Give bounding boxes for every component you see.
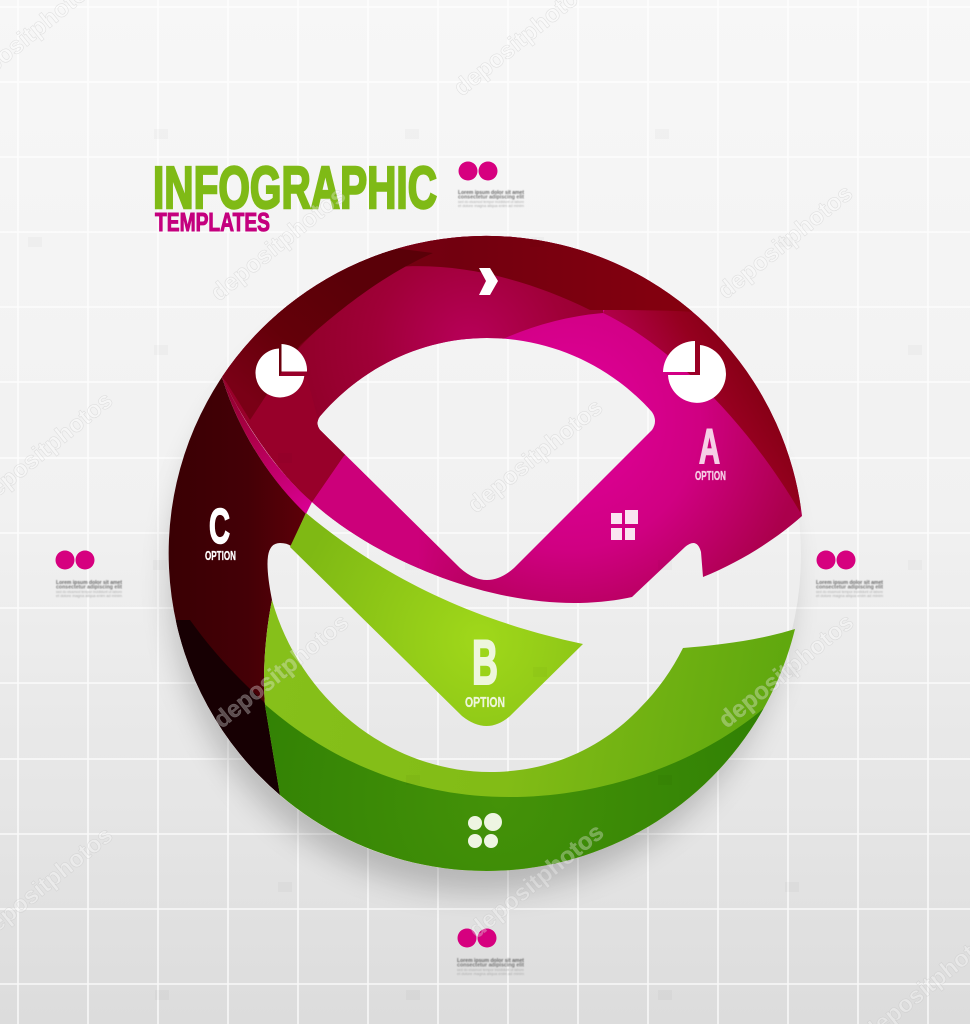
- label: A option: A: [699, 420, 720, 474]
- callout: right: et dolore magna aliqua enim ad minim: [816, 593, 884, 598]
- callout: bottom: et dolore magna aliqua enim ad minim: [457, 971, 525, 976]
- watermark text: depositphotos: [464, 819, 609, 944]
- circle drop shadow: [156, 444, 804, 904]
- label: C option: OPTION: [205, 549, 236, 563]
- watermark camera marks: [28, 129, 922, 1000]
- panel: C segment: [168, 377, 306, 795]
- panel: lower green band: [264, 600, 795, 871]
- callout: top: sed do eiusmod tempor incididunt ut labore: [458, 199, 525, 204]
- label: C option: [205, 500, 236, 563]
- callout: left: sed do eiusmod tempor incididunt ut labore: [56, 589, 123, 594]
- label: C option: C: [209, 500, 230, 554]
- watermark text: depositphotos: [463, 394, 608, 519]
- label: A option: OPTION: [695, 469, 726, 483]
- icon: right pie chart: [663, 341, 726, 403]
- title: [153, 155, 437, 237]
- callout: bottom: consectetur adipiscing elit: [457, 962, 524, 968]
- title: INFOGRAPHIC: [153, 155, 437, 221]
- label: A option: [695, 420, 726, 483]
- callout: right: sed do eiusmod tempor incididunt ut labore: [816, 589, 884, 594]
- icon: squares: [611, 510, 638, 540]
- panel: B segment: [290, 513, 583, 726]
- callout: top: et dolore magna aliqua enim ad minim: [458, 203, 525, 208]
- label: B option: OPTION: [465, 694, 505, 711]
- callout: left: Lorem ipsum dolor sit amet: [56, 580, 122, 586]
- watermark text: depositphotos: [206, 182, 351, 307]
- callout: top: consectetur adipiscing elit: [458, 194, 524, 200]
- callout: bottom: [457, 928, 525, 976]
- callout: right: [816, 550, 884, 598]
- callout: right: consectetur adipiscing elit: [816, 584, 883, 590]
- callout: top: Lorem ipsum dolor sit amet: [458, 190, 524, 196]
- stripe between A and C: [222, 377, 312, 514]
- callout: right: Lorem ipsum dolor sit amet: [816, 580, 883, 586]
- watermark text: depositphotos: [713, 180, 858, 305]
- title: TEMPLATES: [155, 207, 270, 237]
- icon: chevron: [479, 268, 498, 295]
- callout: left: consectetur adipiscing elit: [56, 584, 122, 590]
- watermark text: depositphotos: [209, 609, 354, 734]
- label: B option: B: [472, 628, 498, 698]
- icon: left pie chart: [255, 344, 307, 397]
- callout: top: [458, 162, 525, 208]
- callout: bottom: sed do eiusmod tempor incididunt ut labore: [457, 967, 525, 972]
- callout: left: [56, 550, 123, 598]
- callout: left: et dolore magna aliqua enim ad minim: [56, 593, 123, 598]
- label: B option: [465, 628, 505, 711]
- icon: four circles: [468, 813, 502, 848]
- watermark text: depositphotos: [714, 609, 859, 734]
- panel: A segment: [222, 236, 802, 603]
- callout: bottom: Lorem ipsum dolor sit amet: [457, 958, 524, 964]
